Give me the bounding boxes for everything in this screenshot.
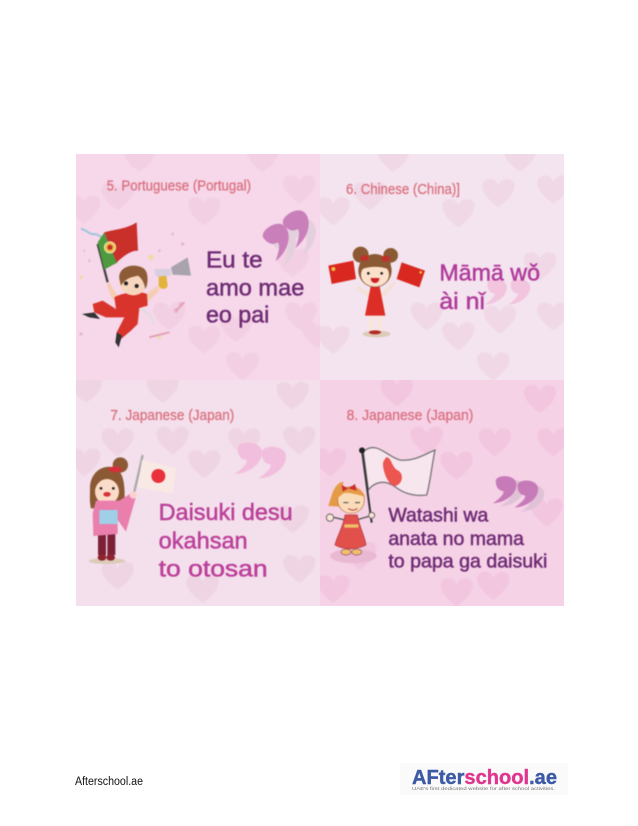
footer text: Afterschool.ae [75,776,143,788]
icon: quotation marks [234,442,286,479]
heading: Chinese: 6. Chinese (China)] [346,182,460,198]
panel: Portuguese [76,154,320,380]
phrase: Japanese 8: Watashi wa [388,506,489,527]
phrase: Portuguese: amo mae [206,275,304,301]
phrase: Japanese 8: to papa ga daisuki [388,551,547,572]
heading: Japanese 7: 7. Japanese (Japan) [110,408,234,424]
heading: Japanese 8: 8. Japanese (Japan) [347,408,473,424]
logo: Afterschool.ae [400,763,568,795]
phrase: Chinese [440,262,540,310]
icon: quotation marks [493,476,544,512]
panel: Japanese 7 [68,375,320,606]
phrase: Chinese: ài nǐ [439,288,487,314]
phrase: Chinese: Māmā wǒ [439,260,540,286]
phrase: Portuguese: eo pai [206,301,269,327]
logo: Afterschool.ae: AFterschool.ae [412,767,557,789]
phrase: Japanese 8: anata no mama [388,529,524,550]
heading: Portuguese: 5. Portuguese (Portugal) [107,179,251,195]
phrase: Japanese 7: Daisuki desu [159,499,293,525]
panel: Japanese 8 [314,378,570,606]
phrase: Japanese 7: to otosan [159,556,268,582]
logo: Afterschool.ae: UAE's first dedicated website for after school activities. [412,786,555,792]
icon: quotation marks [262,210,316,264]
phrase: Japanese 7 [159,499,293,582]
phrase: Japanese 7: okahsan [159,527,248,553]
illustration: boy with Portuguese flag [79,222,191,347]
icon: quotation marks [485,279,530,305]
panel: Chinese [317,144,570,380]
illustration: girl in kimono with Japanese flag [89,455,176,564]
illustration: girl with hand-drawn Japanese flag [326,447,435,563]
phrase: Portuguese [206,246,304,327]
phrase: Japanese 8 [388,506,547,572]
phrase: Portuguese: Eu te [206,246,263,272]
illustration: girl with Chinese flags [328,247,425,337]
